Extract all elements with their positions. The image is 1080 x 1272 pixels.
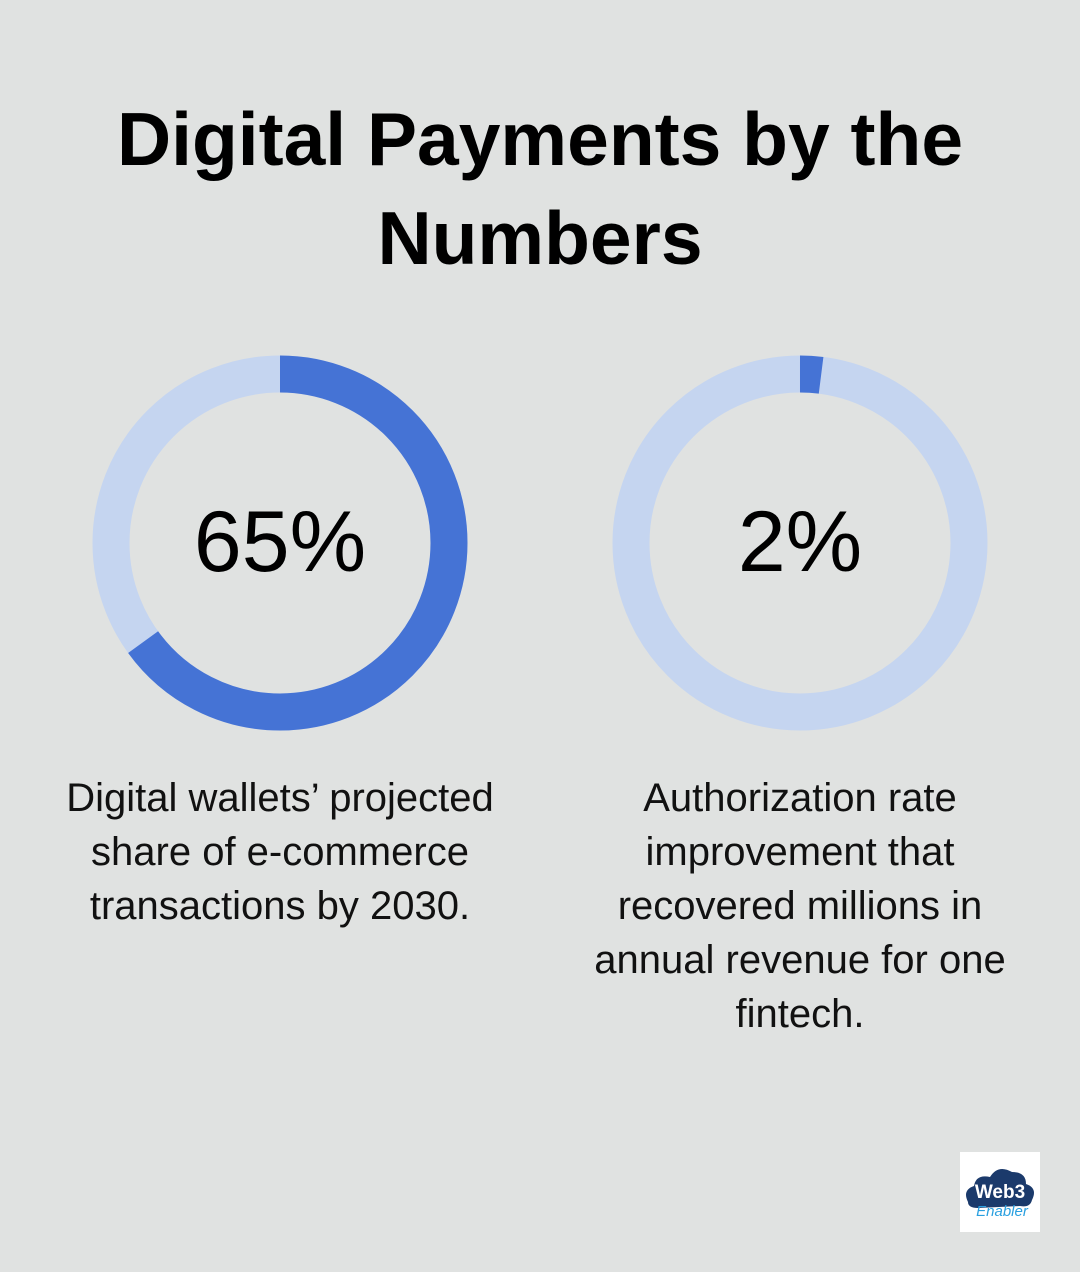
title: Digital Payments by the bbox=[117, 97, 963, 181]
title: Numbers bbox=[377, 196, 703, 280]
donut chart: 2% bbox=[612, 356, 988, 730]
donut chart: 65%: 65% bbox=[194, 494, 366, 590]
title bbox=[117, 97, 963, 280]
logo: Web3 Enabler: Enabler bbox=[976, 1203, 1029, 1220]
caption: 65%: Digital wallets’ projected share of e-commerce transactions by 2030. bbox=[66, 776, 494, 928]
logo: Web3 Enabler: Web3 bbox=[975, 1182, 1025, 1203]
donut chart: 2%: 2% bbox=[738, 494, 862, 590]
donut chart: 65% bbox=[92, 356, 468, 730]
logo: Web3 Enabler bbox=[960, 1152, 1040, 1232]
caption: 2%: Authorization rate improvement that recovered millions in annual revenue for one fintech. bbox=[594, 776, 1006, 1036]
